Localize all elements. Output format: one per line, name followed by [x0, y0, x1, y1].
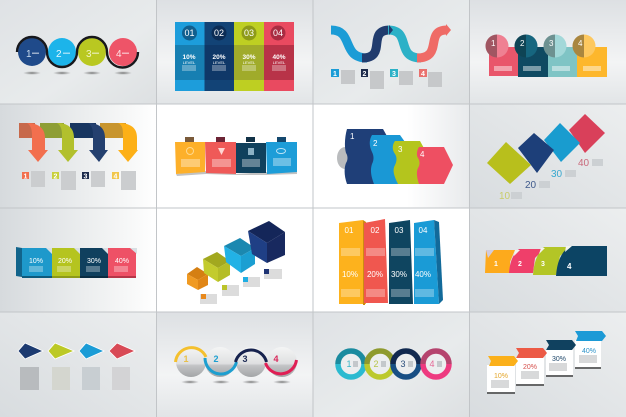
panel: interlocked rings: 1: [346, 359, 352, 369]
panel: stepped ribbon cards: 20%: [523, 364, 537, 371]
panel: stepped ribbon cards: 30%: [552, 356, 566, 363]
panel: arrowhead tags: [18, 343, 135, 390]
panel: curled tabs: 1: [494, 261, 498, 268]
panel: four level columns: 01: [184, 28, 195, 38]
panel: spheres with rings: [176, 347, 297, 384]
panel: circles on tabs: [486, 34, 607, 77]
panel: folded percent tabs: [16, 247, 137, 278]
panel: four linked circles: 2: [56, 49, 62, 60]
panel: vertical 3d columns: 01: [345, 226, 354, 235]
panel: curled tabs: 3: [541, 261, 545, 268]
panel: curled tabs: [485, 246, 607, 276]
panel: four level columns: LEVEL: [243, 60, 256, 65]
panel: folded percent tabs: 40%: [115, 258, 129, 265]
panel: spheres with rings: 3: [242, 354, 248, 364]
panel: down arrows: 1: [24, 174, 28, 180]
panel: curled tabs: 4: [567, 262, 572, 271]
panel: wave arrow: 2: [363, 71, 367, 78]
panel: folded percent tabs: 30%: [87, 258, 101, 265]
panel: interlocked rings: 4: [429, 359, 435, 369]
panel: four level columns: 10%: [182, 54, 196, 61]
panel: interlocked rings: 3: [400, 359, 406, 369]
panel: wave arrow: 1: [333, 71, 337, 78]
panel: vertical 3d columns: 03: [395, 226, 404, 235]
panel: vertical 3d columns: 40%: [415, 270, 431, 279]
panel: circles on tabs: 4: [578, 39, 583, 48]
panel: interlocked rings: 2: [373, 359, 379, 369]
panel: down arrows: 3: [84, 174, 88, 180]
panel: stepped ribbon cards: 10%: [494, 373, 508, 380]
panel: four level columns: LEVEL: [183, 60, 196, 65]
panel: four linked circles: 4: [116, 49, 122, 60]
panel: four level columns: LEVEL: [213, 60, 226, 65]
panel: four linked circles: 3: [86, 49, 92, 60]
panel: stepped ribbon cards: [487, 331, 606, 394]
panel: diamonds: [487, 114, 605, 202]
panel: rising cubes: [187, 221, 285, 304]
panel: hexagons: 1: [350, 132, 355, 141]
panel: curled tabs: 2: [518, 261, 522, 268]
panel: stepped ribbon cards: 40%: [582, 348, 596, 355]
panel: hexagons: [337, 129, 453, 184]
panel: diamonds: 10: [499, 191, 511, 202]
panel: interlocked rings: [338, 351, 449, 377]
panel: four level columns: 02: [214, 28, 224, 38]
panel: circles on tabs: 2: [520, 39, 525, 48]
panel: vertical 3d columns: 04: [419, 226, 428, 235]
panel: four level columns: 40%: [272, 54, 286, 61]
panel: vertical 3d columns: 02: [371, 226, 380, 235]
panel: four level columns: 03: [244, 28, 254, 38]
panel: diamonds: 20: [525, 180, 537, 191]
panel: hexagons: 2: [373, 139, 378, 148]
panel: diamonds: 40: [578, 158, 590, 169]
panel: diamonds: 30: [551, 169, 563, 180]
panel: four level columns: 20%: [212, 54, 226, 61]
panel: spheres with rings: 4: [273, 354, 279, 364]
panel: wave arrow: 3: [392, 71, 396, 78]
panel: hexagons: 3: [398, 145, 403, 154]
panel: circles on tabs: 3: [549, 39, 554, 48]
panel: vertical 3d columns: 20%: [367, 270, 383, 279]
panel: spheres with rings: 2: [213, 354, 219, 364]
panel: down arrows: [19, 123, 138, 190]
panel: wave arrow: 4: [421, 71, 425, 78]
panel: spheres with rings: 1: [183, 354, 189, 364]
panel: vertical 3d columns: 10%: [342, 270, 358, 279]
panel: sticky notes: [175, 137, 297, 176]
panel: four linked circles: 1: [26, 49, 32, 60]
panel: four linked circles: [17, 37, 138, 75]
panel: four level columns: 30%: [242, 54, 256, 61]
panel: folded percent tabs: 20%: [58, 258, 72, 265]
panel: four level columns: LEVEL: [273, 60, 286, 65]
panel: folded percent tabs: 10%: [29, 258, 43, 265]
panel: four level columns: [175, 22, 294, 91]
panel: four level columns: 04: [273, 28, 283, 38]
panel: down arrows: 4: [114, 174, 118, 180]
panel: circles on tabs: 1: [491, 39, 496, 48]
panel: vertical 3d columns: [339, 219, 443, 305]
panel: wave arrow: [331, 24, 451, 89]
panel: hexagons: 4: [420, 150, 425, 159]
panel: down arrows: 2: [54, 174, 58, 180]
panel: vertical 3d columns: 30%: [391, 270, 407, 279]
